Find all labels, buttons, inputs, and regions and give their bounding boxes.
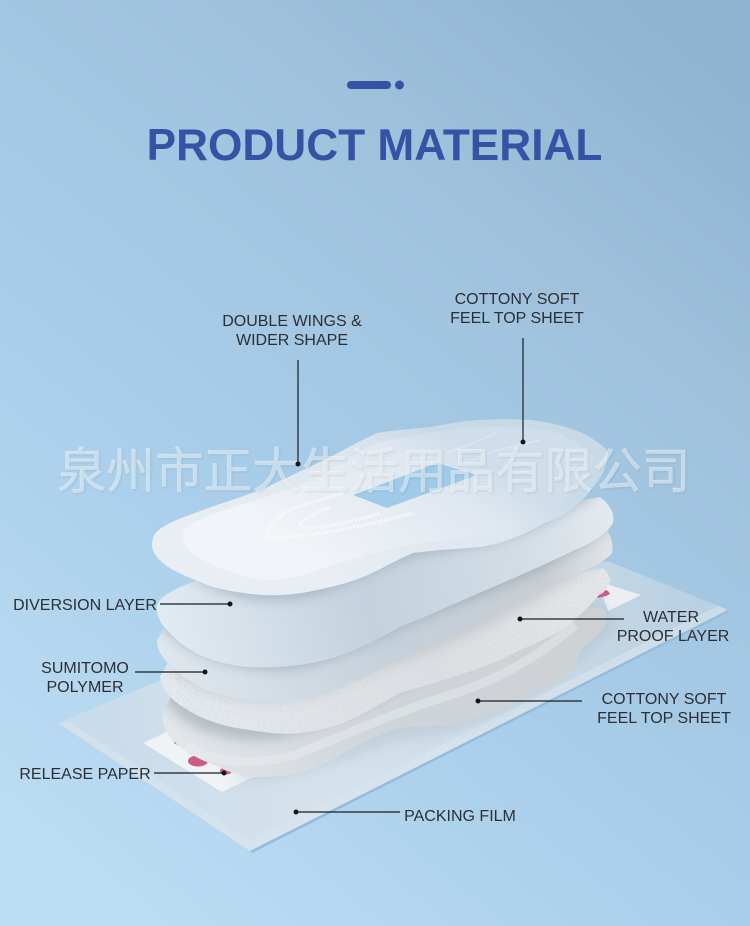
callout: cottony soft bottom: COTTONY SOFT [602,691,727,708]
shadow on film [230,600,615,781]
blue window in top layer [353,463,477,508]
callout: release paper [19,766,226,783]
absorbent channel grooves [267,493,413,538]
callout: double wings [222,313,362,466]
pad layer: water proof textured layer [160,568,610,734]
callout: water proof layer: PROOF LAYER [617,628,729,645]
callout: double wings: WIDER SHAPE [236,332,348,349]
callout: cottony soft bottom [476,691,731,727]
callout: cottony soft top: COTTONY SOFT [455,291,580,308]
callout: packing film: PACKING FILM [404,808,516,825]
callout: cottony soft top: FEEL TOP SHEET [450,310,584,327]
heading accent: bar and dot [347,80,404,90]
release paper flowers [174,590,610,774]
callout: cottony soft bottom: FEEL TOP SHEET [597,710,731,727]
callout: diversion layer [13,597,232,614]
callout: sumitomo polymer [41,660,208,696]
callout: cottony soft top [450,291,584,444]
pad layer: sumitomo polymer [157,530,613,701]
callout: diversion layer: DIVERSION LAYER [13,597,157,614]
callout: sumitomo polymer: SUMITOMO [41,660,129,677]
title: PRODUCT MATERIAL [147,121,602,170]
callout: water proof layer: WATER [643,609,699,626]
callout: release paper: RELEASE PAPER [19,766,151,783]
watermark: 泉州市正大生活用品有限公司 [58,433,690,503]
callout: double wings: DOUBLE WINGS & [222,313,362,330]
illustration: layered sanitary pad on packing film [58,419,729,853]
packing film [58,560,729,853]
pad layer: bottom cottony sheet [162,607,607,777]
pad inner absorbent body [182,427,593,580]
pad layer: top sheet with wings [152,419,608,595]
callout: water proof layer [518,609,729,645]
callout: packing film [294,808,516,825]
callout: sumitomo polymer: POLYMER [46,679,124,696]
pad layer: diversion layer [156,497,614,668]
release paper [143,584,641,792]
